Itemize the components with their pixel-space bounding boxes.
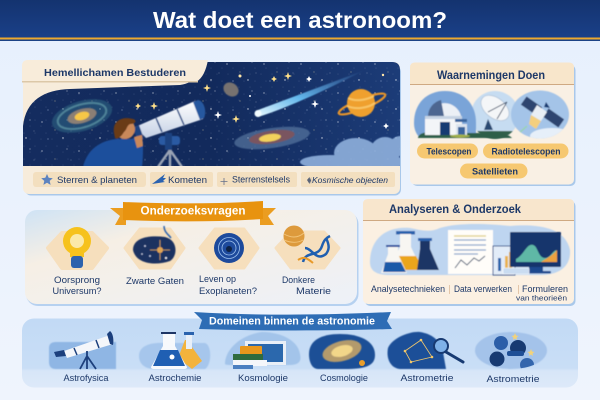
domain: Astrometrie constellation [388, 332, 463, 384]
telescope tube [133, 100, 205, 141]
question: Donkere Materie [276, 226, 339, 297]
domain: Kosmologie [225, 332, 301, 384]
labels: van theorieën [516, 296, 567, 302]
planet Saturn [337, 89, 387, 118]
panel: Hemellichamen Bestuderen [22, 60, 410, 196]
domain: Astrofysica [49, 331, 116, 384]
chip: Kosmische objecten: Kosmische objecten [312, 175, 388, 185]
labels [371, 284, 568, 302]
panel: Onderzoeksvragen [25, 201, 358, 306]
chip: Kometen [150, 172, 213, 187]
question: Zwarte Gaten [125, 226, 184, 287]
illustration: night sky with telescope [23, 60, 410, 170]
domain: Kosmologie: Kosmologie [238, 373, 288, 384]
domain: Cosmologie: Cosmologie [320, 373, 368, 384]
pill: Satellieten [460, 164, 528, 178]
heading: Waarnemingen Doen [437, 70, 545, 82]
chip: Sterren & planeten: Sterren & planeten [57, 175, 137, 186]
question: Leven op Exoplaneten: Leven op [199, 274, 236, 285]
illustration: lab and data [370, 224, 570, 275]
chip: Sterrenstelsels [217, 172, 297, 187]
heading: Analyseren & Onderzoek [389, 204, 522, 216]
question: Oorsprong Universum [48, 227, 107, 297]
question: Donkere Materie: Materie [296, 286, 331, 297]
question: Leven op Exoplaneten: Exoplaneten? [199, 286, 257, 297]
illustration: observatory [414, 91, 512, 138]
pill: Satellieten: Satellieten [472, 166, 518, 178]
pill: Telescopen: Telescopen [426, 146, 472, 158]
domain: Astrochemie [139, 332, 210, 384]
galaxy top-left [52, 99, 112, 133]
person [83, 118, 143, 167]
panel: Waarnemingen Doen [410, 62, 576, 186]
heading tab: Hemellichamen Bestuderen [22, 60, 208, 82]
domain: Astrometrie constellation: Astrometrie [400, 373, 454, 384]
panel: Domeinen binnen de astronomie [22, 312, 578, 388]
labels: Formuleren [522, 284, 568, 295]
clouds [300, 136, 400, 166]
domain: Astrochemie: Astrochemie [148, 373, 202, 384]
tablet chart [493, 246, 515, 275]
pill: Radiotelescopen [483, 144, 568, 158]
pill: Radiotelescopen: Radiotelescopen [492, 146, 561, 158]
question: Leven op Exoplaneten [199, 229, 258, 297]
flasks [381, 231, 439, 273]
comet [254, 74, 357, 118]
title banner: Wat doet een astronoom? [153, 7, 447, 33]
panel: Analyseren & Onderzoek [363, 199, 576, 306]
galaxy lower [234, 126, 310, 150]
question: Donkere Materie: Donkere [282, 275, 315, 286]
title banner [0, 0, 600, 41]
chip: Kosmische objecten [301, 172, 395, 187]
monitor [503, 232, 561, 274]
ribbon heading: Domeinen binnen de astronomie [209, 316, 375, 328]
domain: Astrometrie asteroids: Astrometrie [486, 374, 540, 385]
labels: Data verwerken [454, 284, 512, 295]
ribbon heading [194, 312, 392, 330]
question: Zwarte Gaten: Zwarte Gaten [126, 276, 184, 287]
domain: Astrometrie asteroids [475, 332, 547, 385]
document [448, 230, 493, 274]
domain: Astrofysica: Astrofysica [64, 373, 109, 384]
labels: Analysetechnieken [371, 284, 445, 295]
chip: Kometen: Kometen [168, 175, 207, 186]
ribbon heading [110, 201, 276, 225]
small galaxy [222, 82, 240, 98]
question: Oorsprong Universum: Universum? [52, 286, 102, 297]
tripod [158, 133, 182, 167]
chip: Sterren & planeten [33, 172, 146, 187]
heading tab: Hemellichamen Bestuderen: Hemellichamen Bestuderen [44, 67, 186, 79]
question: Oorsprong Universum: Oorsprong [54, 275, 100, 286]
astronomer figure [83, 100, 205, 167]
domain: Cosmologie [309, 334, 375, 384]
illustration: satellite [510, 90, 570, 139]
ribbon heading: Onderzoeksvragen [140, 206, 246, 218]
pill: Telescopen [417, 144, 478, 158]
chip: Sterrenstelsels: Sterrenstelsels [232, 174, 290, 184]
illustration: radio dish [472, 90, 516, 140]
